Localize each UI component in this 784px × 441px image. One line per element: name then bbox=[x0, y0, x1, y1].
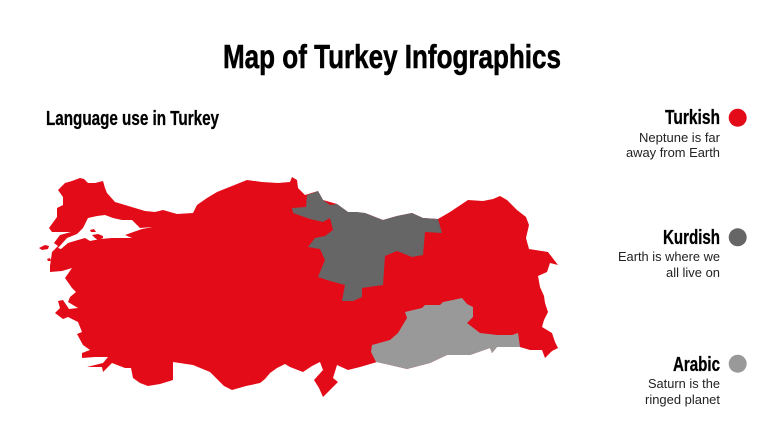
Turkish description bbox=[626, 130, 721, 160]
Turkish colour dot bbox=[729, 109, 747, 127]
map of Turkey bbox=[39, 177, 558, 397]
Sea of Marmara bbox=[58, 215, 153, 249]
Kurdish colour dot bbox=[729, 228, 747, 246]
legend: Arabic bbox=[645, 354, 747, 407]
region: Arabic (light grey) bbox=[371, 298, 520, 369]
Arabic description: Saturn is the bbox=[648, 376, 720, 391]
Kurdish description bbox=[618, 249, 720, 280]
Turkish description: Neptune is far bbox=[639, 130, 721, 145]
subtitle: language use: Language use in Turkey bbox=[46, 108, 220, 130]
Kurdish description: all live on bbox=[666, 265, 720, 280]
Turkish heading: Turkish bbox=[665, 107, 720, 129]
title: Map of Turkey Infographics bbox=[223, 38, 561, 75]
region: Kurdish (dark grey) bbox=[292, 191, 442, 301]
Arabic heading: Arabic bbox=[673, 354, 720, 376]
legend: Kurdish bbox=[618, 227, 747, 280]
Turkish description: away from Earth bbox=[626, 145, 720, 160]
legend: Turkish bbox=[626, 107, 747, 160]
Marmara islands bbox=[90, 229, 103, 240]
region: Turkish (red) bbox=[39, 177, 558, 397]
Arabic description: ringed planet bbox=[645, 392, 720, 407]
Arabic description bbox=[645, 376, 720, 407]
Arabic colour dot bbox=[729, 355, 747, 373]
Kurdish heading: Kurdish bbox=[663, 227, 720, 249]
Kurdish description: Earth is where we bbox=[618, 249, 720, 264]
